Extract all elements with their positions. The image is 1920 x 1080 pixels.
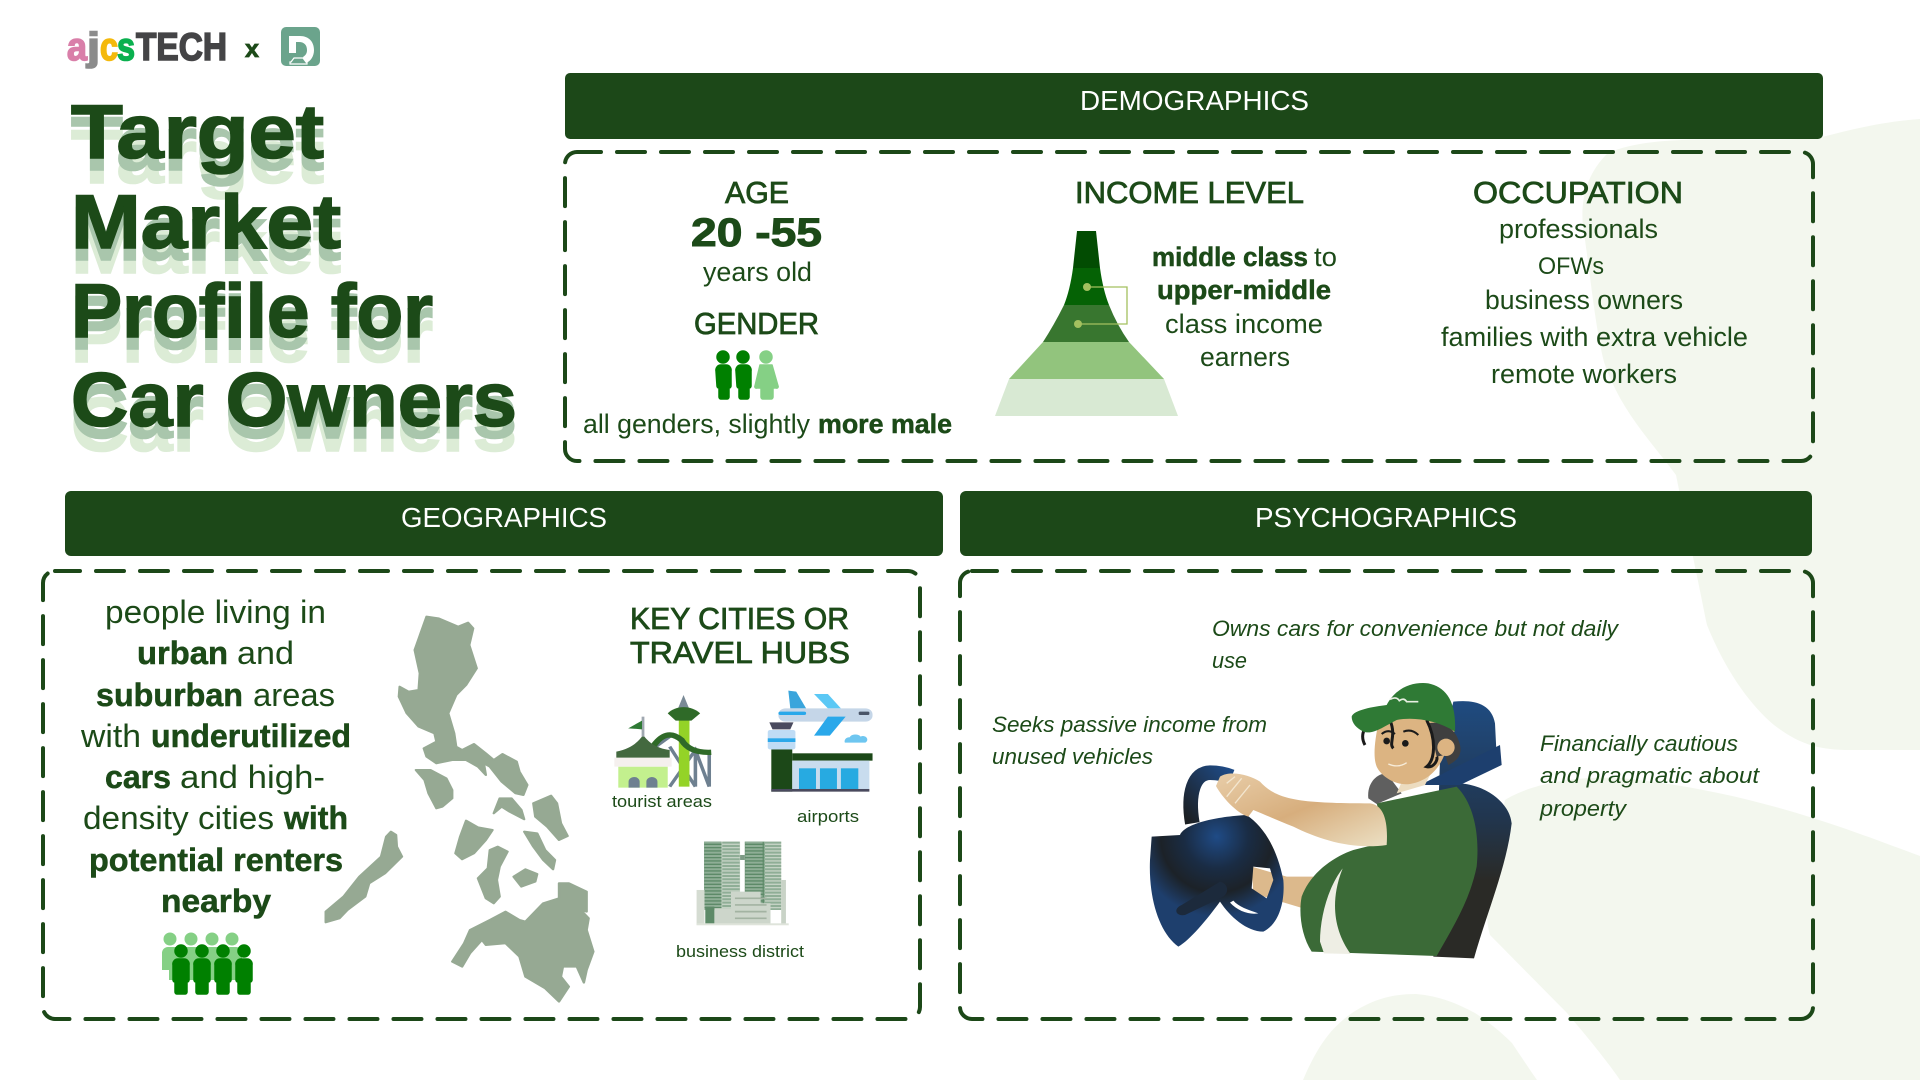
hair	[1428, 723, 1461, 765]
income text: earners	[1200, 342, 1290, 372]
age block: years old	[703, 257, 812, 287]
title: Target	[71, 90, 324, 175]
logo wordmark	[67, 26, 227, 69]
age block: AGE	[725, 175, 789, 210]
geographics description text: density cities	[83, 800, 274, 836]
title	[71, 90, 517, 468]
icon: airports	[768, 691, 873, 792]
background blobs	[1303, 119, 1920, 1080]
heading bar: demographics	[565, 73, 1823, 139]
chart: income pyramid	[995, 231, 1178, 416]
title: Market	[71, 180, 341, 265]
geographics description text	[80, 594, 351, 919]
psychographic statement: financially cautious: and pragmatic about	[1540, 763, 1760, 788]
title: Profile for	[71, 269, 433, 354]
cap	[1352, 683, 1455, 732]
income text: middle class	[1152, 242, 1308, 272]
geographics description text: suburban	[96, 677, 243, 713]
income text: to	[1314, 242, 1337, 272]
icon: business district	[697, 842, 789, 925]
age block	[691, 175, 822, 287]
occupation list	[1441, 214, 1748, 389]
steering wheel	[1191, 773, 1232, 823]
occupation list: OFWs	[1538, 253, 1604, 280]
geographics description text: and	[237, 635, 294, 671]
title: Car Owners	[71, 370, 517, 455]
gender text	[583, 409, 952, 439]
title: Car Owners	[71, 383, 517, 468]
key cities heading	[630, 601, 850, 670]
geographics description text: nearby	[161, 883, 271, 919]
logo wordmark: a	[67, 26, 87, 69]
psychographic statement: passive income: unused vehicles	[992, 744, 1153, 769]
neck pillow	[1368, 773, 1402, 804]
title: Target	[71, 115, 324, 200]
income heading: INCOME LEVEL	[1075, 175, 1304, 210]
psychographic statement: convenience: use	[1212, 648, 1247, 673]
label: business district: business district	[676, 942, 804, 961]
logo: ajcsTECH x D	[67, 26, 320, 69]
psychographic statement: convenience	[1212, 616, 1620, 673]
heading bar: geographics	[65, 491, 943, 556]
psychographic statement: convenience: Owns cars for convenience but not daily	[1212, 616, 1620, 641]
gender heading: GENDER	[694, 306, 819, 341]
geographics description text: potential renters	[89, 842, 343, 878]
undershirt	[1320, 868, 1351, 954]
back arm	[1252, 867, 1313, 908]
geographics description text: underutilized	[151, 718, 351, 754]
logo badge D	[281, 27, 320, 66]
label: airports: airports	[797, 807, 859, 826]
title: Target	[71, 102, 324, 187]
title: Market	[71, 192, 341, 277]
title: Market	[71, 205, 341, 290]
eyes and smile	[1382, 731, 1418, 735]
psychographic statement: financially cautious: Financially cautious	[1540, 731, 1738, 756]
occupation list: business owners	[1485, 285, 1683, 315]
neck	[1397, 775, 1430, 793]
logo wordmark: TECH	[136, 26, 227, 69]
icon: crowd of people	[162, 932, 252, 994]
title: Car Owners	[71, 358, 517, 443]
logo wordmark: j	[86, 26, 100, 69]
icon: tourist areas	[614, 695, 711, 788]
illustration: driver at the wheel	[1150, 683, 1512, 958]
logo wordmark: s	[117, 26, 135, 69]
geographics description text: cars	[105, 759, 171, 795]
seatbelt strap	[1420, 745, 1502, 785]
income text: upper-middle	[1157, 275, 1331, 305]
geographics description text: with	[283, 800, 348, 836]
panel: geographics	[43, 571, 920, 1019]
gender text: all genders, slightly	[583, 409, 810, 439]
panel: psychographics	[960, 571, 1813, 1019]
occupation list: professionals	[1499, 214, 1658, 244]
title: Profile for	[71, 281, 433, 366]
seat	[1433, 701, 1512, 958]
panel: demographics	[565, 152, 1813, 461]
icon: gender people	[716, 351, 778, 399]
income text: class income	[1165, 309, 1323, 339]
shirt	[1300, 787, 1477, 956]
psychographic statement: financially cautious: property	[1539, 796, 1628, 821]
label: tourist areas: tourist areas	[612, 792, 712, 811]
geographics description text: with	[80, 718, 141, 754]
geographics description text: people living in	[105, 594, 326, 630]
gender text: more male	[818, 409, 952, 439]
heading bar: geographics: GEOGRAPHICS	[401, 502, 607, 533]
occupation list: remote workers	[1491, 359, 1677, 389]
psychographic statement: passive income	[992, 712, 1267, 769]
age block: 20 -55	[691, 211, 822, 255]
heading bar: psychographics: PSYCHOGRAPHICS	[1255, 502, 1517, 533]
front arm and hand	[1216, 774, 1387, 846]
logo separator x: x	[245, 36, 260, 63]
psychographic statement: passive income: Seeks passive income from	[992, 712, 1267, 737]
psychographic statement: financially cautious	[1539, 731, 1760, 821]
geographics description text: urban	[137, 635, 228, 671]
title: Profile for	[71, 294, 433, 379]
income text	[1152, 242, 1337, 372]
key cities heading: KEY CITIES OR	[630, 601, 849, 636]
key cities heading: TRAVEL HUBS	[630, 635, 850, 670]
logo wordmark: c	[100, 26, 118, 69]
head	[1375, 710, 1455, 784]
map: Philippines	[326, 617, 593, 1002]
occupation list: families with extra vehicle	[1441, 322, 1748, 352]
heading bar: demographics: DEMOGRAPHICS	[1080, 85, 1309, 116]
geographics description text: and high-	[180, 759, 325, 795]
geographics description text: areas	[253, 677, 335, 713]
heading bar: psychographics	[960, 491, 1812, 556]
occupation heading: OCCUPATION	[1473, 175, 1683, 210]
